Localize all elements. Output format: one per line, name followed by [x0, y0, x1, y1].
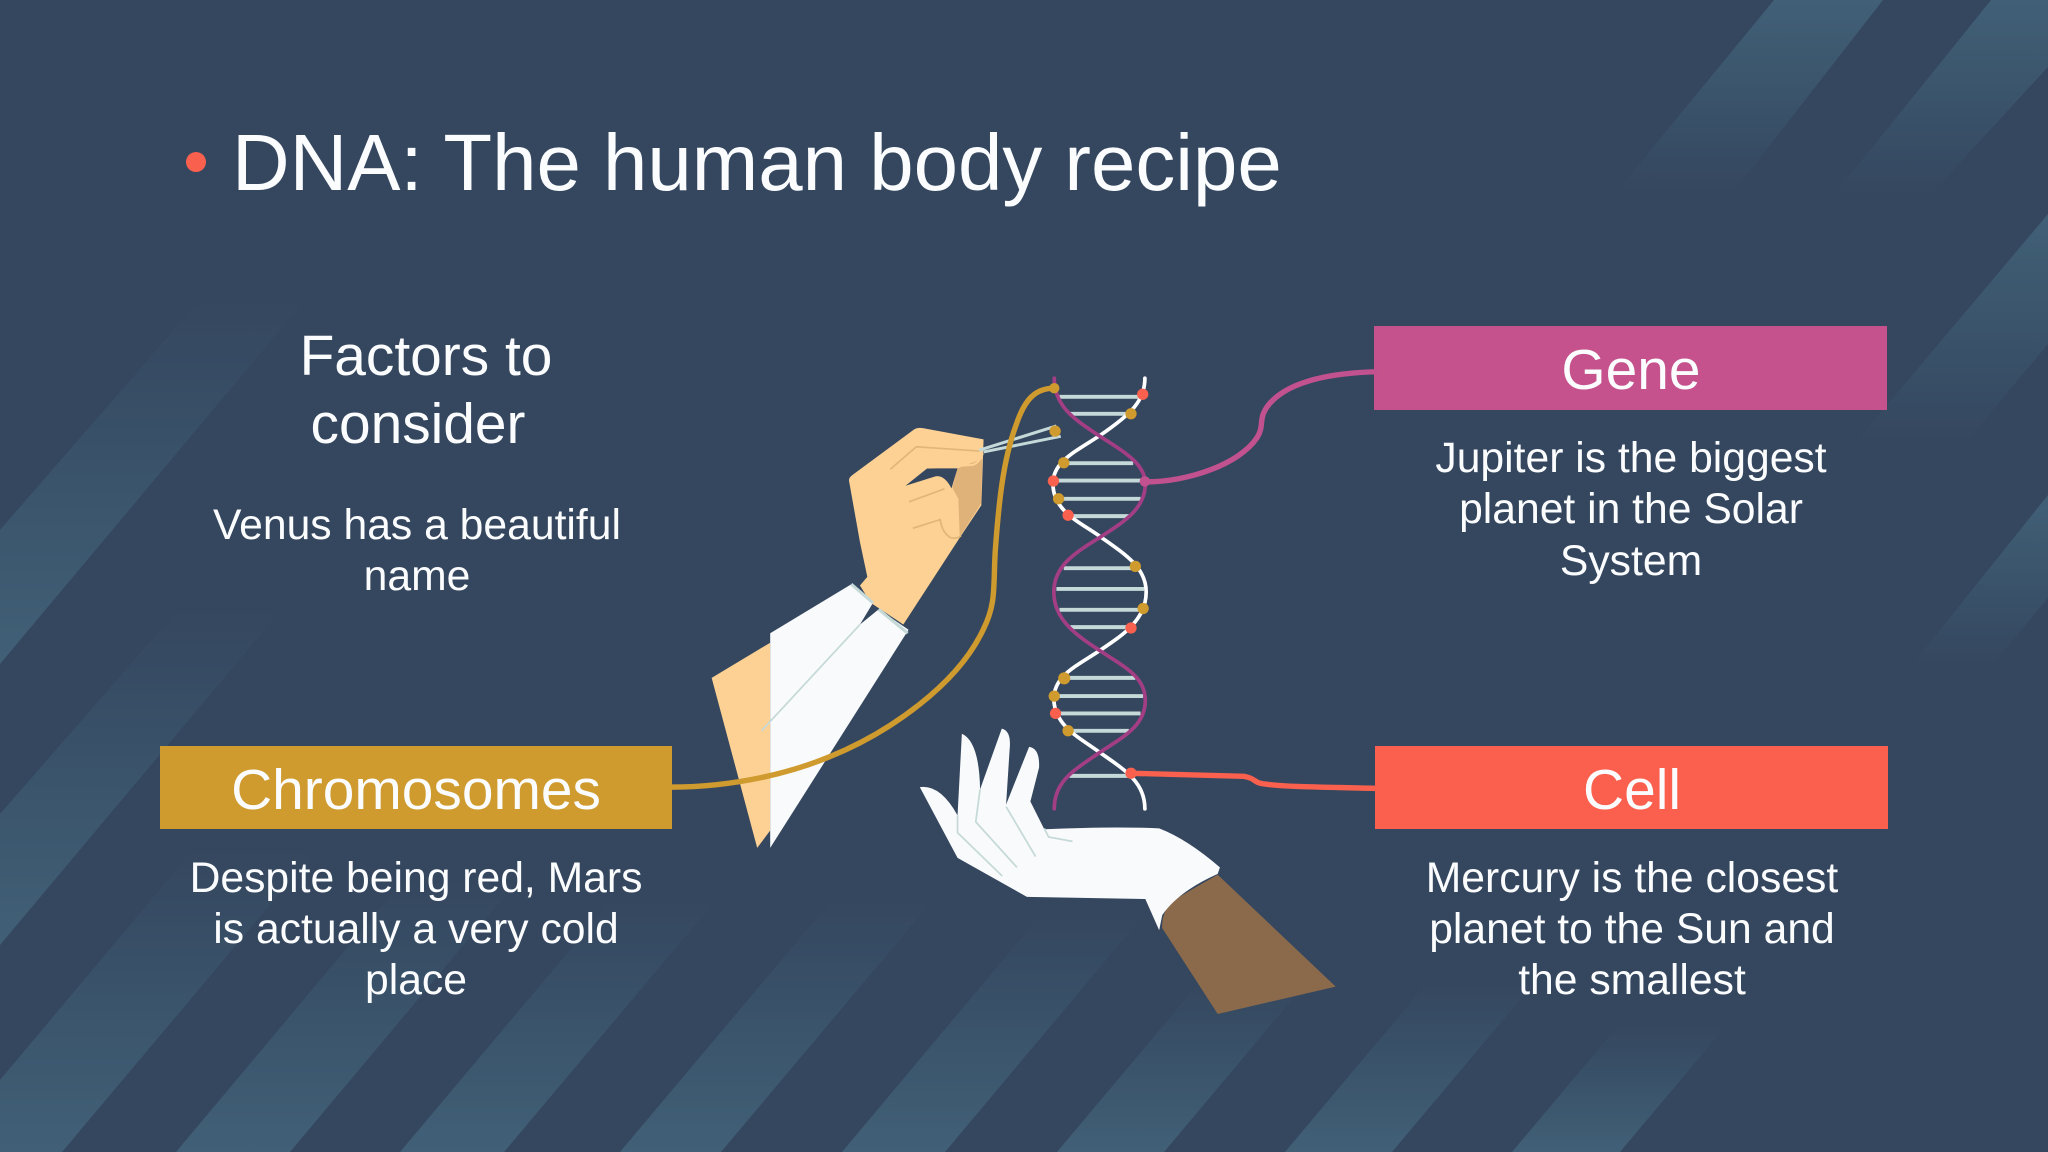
text block: cell description: planet to the Sun and	[1429, 905, 1835, 953]
heading: factors to consider: Factors to	[300, 324, 552, 388]
illustration: DNA with hands	[671, 372, 1378, 1014]
text block: cell description: Mercury is the closest	[1426, 854, 1838, 902]
text block: gene description: System	[1560, 537, 1702, 585]
panel: chromosomes label: Chromosomes	[231, 758, 601, 822]
panel: gene label: Gene	[1561, 338, 1701, 402]
icon: raised arm with lab coat	[712, 426, 1061, 848]
text block: chromosomes description: Despite being red, Mars	[190, 854, 642, 902]
heading: factors to consider: consider	[311, 392, 525, 456]
body: venus: name	[364, 552, 470, 600]
panel: gene label	[1374, 326, 1887, 410]
text block: chromosomes description: is actually a very cold	[213, 905, 619, 953]
text block: factors to consider	[213, 324, 621, 600]
icon: open gloved hand	[920, 729, 1336, 1014]
helix nucleotide dots	[1048, 383, 1150, 779]
title	[186, 118, 1282, 207]
icon: DNA double helix	[1053, 378, 1146, 809]
bullet dot	[186, 152, 206, 172]
title text: DNA: The human body recipe	[232, 118, 1282, 207]
body: venus: Venus has a beautiful	[213, 501, 621, 549]
arrow: chromosomes connector	[671, 388, 1054, 787]
panel: cell label	[1375, 746, 1888, 829]
text block: gene description: planet in the Solar	[1459, 485, 1803, 533]
text block: cell description: the smallest	[1518, 956, 1746, 1004]
panel: chromosomes label	[160, 746, 672, 829]
text block: chromosomes description: place	[365, 956, 467, 1004]
arrow: cell connector	[1131, 773, 1378, 788]
arrow: gene connector	[1145, 372, 1378, 482]
text block: gene description: Jupiter is the biggest	[1435, 434, 1827, 482]
panel: cell label: Cell	[1583, 758, 1681, 822]
